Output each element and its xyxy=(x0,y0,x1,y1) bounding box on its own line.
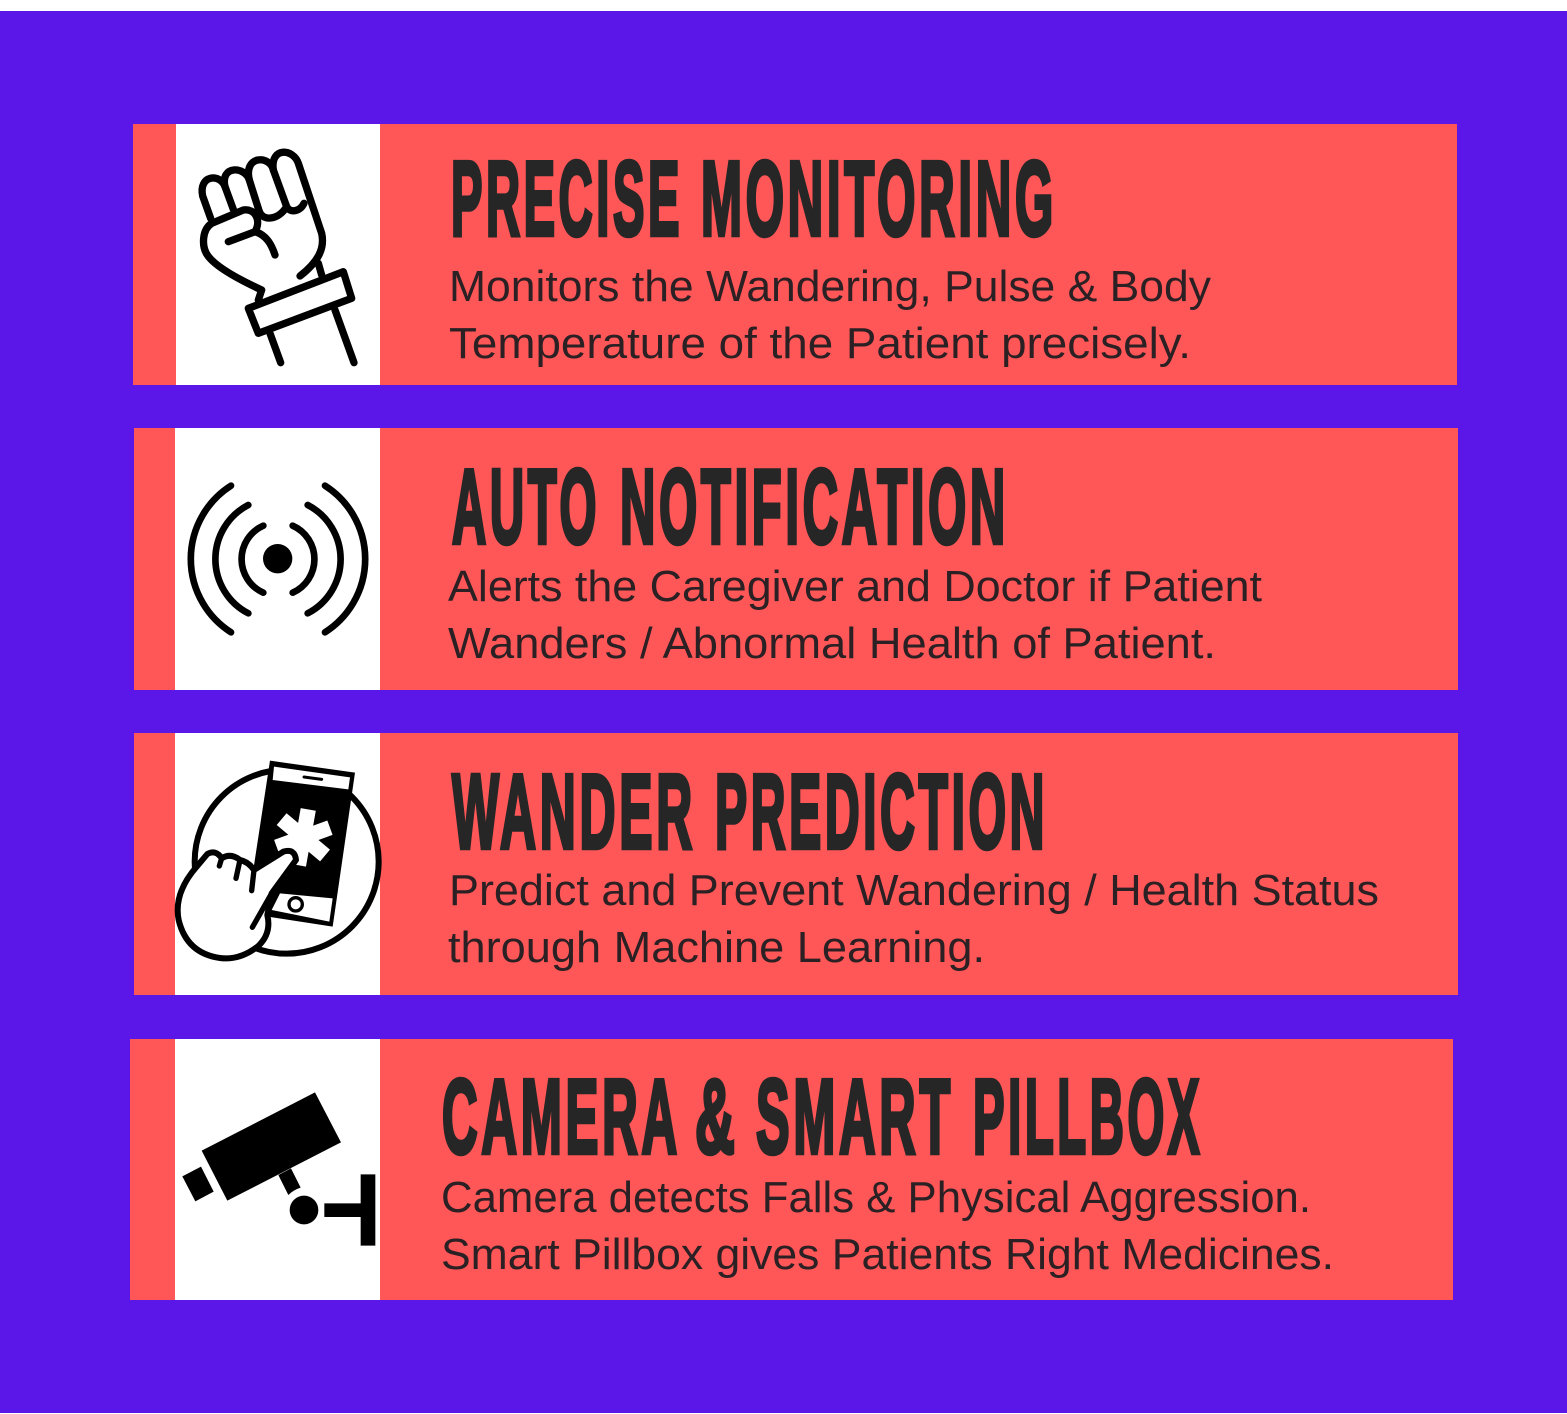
heading: CAMERA xyxy=(442,1058,679,1176)
panel: wander prediction: PREDICTION xyxy=(715,753,1048,871)
heading: WANDER xyxy=(452,753,696,871)
description xyxy=(448,562,1262,668)
description: Temperature of the Patient precisely. xyxy=(449,319,1191,368)
panel: camera and smart pillbox xyxy=(130,1039,1453,1300)
heading: SMART xyxy=(756,1058,954,1176)
panel: auto notification xyxy=(134,428,1458,690)
description xyxy=(449,262,1211,368)
panel: precise monitoring: MONITORING xyxy=(701,140,1057,258)
panel: precise monitoring xyxy=(133,124,1457,385)
panel: camera and smart pillbox: PILLBOX xyxy=(973,1058,1203,1176)
icon: raised fist xyxy=(202,152,354,363)
heading: AUTO xyxy=(452,448,600,566)
icon: signal broadcast xyxy=(191,486,365,632)
icon: hand tapping phone xyxy=(178,761,379,958)
description: Predict and Prevent Wandering / Health Status xyxy=(449,866,1379,915)
description xyxy=(448,866,1379,972)
description: Wanders / Abnormal Health of Patient. xyxy=(448,619,1216,668)
description xyxy=(441,1173,1334,1279)
description: Smart Pillbox gives Patients Right Medicines. xyxy=(441,1230,1334,1279)
icon: security camera xyxy=(182,1092,375,1246)
description: Monitors the Wandering, Pulse & Body xyxy=(449,262,1211,311)
description: through Machine Learning. xyxy=(448,923,985,972)
description: Alerts the Caregiver and Doctor if Patient xyxy=(448,562,1262,611)
description: Camera detects Falls & Physical Aggression. xyxy=(441,1173,1311,1222)
panel: auto notification: NOTIFICATION xyxy=(620,448,1009,566)
heading: & xyxy=(695,1058,739,1176)
heading: PRECISE xyxy=(451,140,683,258)
panel: wander prediction xyxy=(134,733,1458,995)
